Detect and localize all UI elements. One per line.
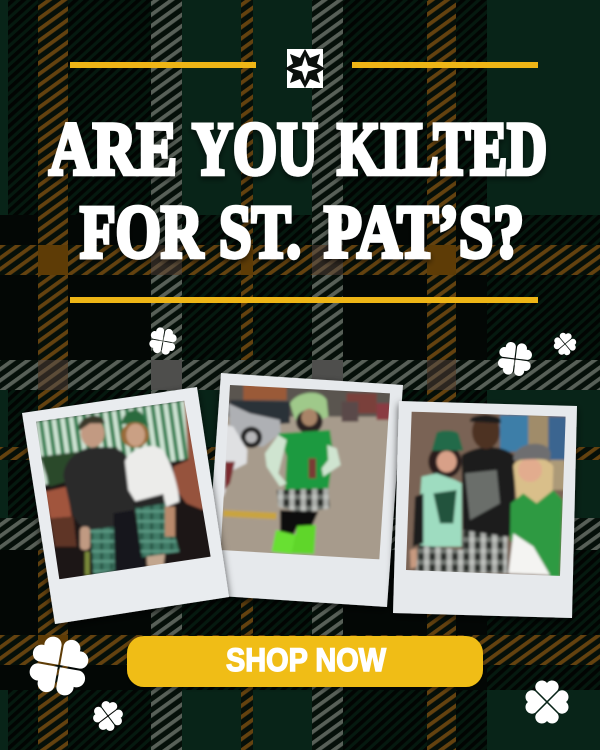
- button: shop now: [127, 636, 483, 687]
- title: YOU: [192, 108, 318, 191]
- woman: [120, 410, 149, 425]
- top divider left: [70, 62, 256, 68]
- polaroid: three friends: [393, 401, 577, 618]
- woman right: [510, 458, 554, 505]
- title: ST.: [219, 191, 301, 274]
- man centre: [462, 447, 515, 573]
- polaroid frame 2: [205, 373, 403, 607]
- polaroid: woman in green: [205, 373, 403, 607]
- icon: shamrock top right small: [553, 332, 577, 356]
- title: PAT’S?: [324, 191, 524, 274]
- title: FOR: [80, 191, 204, 274]
- button: shop now: SHOP NOW: [226, 642, 387, 678]
- figure: [290, 393, 328, 420]
- title: ARE: [49, 108, 177, 191]
- top divider right: [352, 62, 538, 68]
- icon: shamrock bottom right: [526, 680, 568, 724]
- title: [49, 108, 547, 274]
- icon: shamrock bottom left small: [92, 700, 124, 732]
- polaroid frame 3: [393, 401, 577, 618]
- photo 3: [403, 410, 570, 577]
- icon: shamrock top right large: [491, 335, 539, 383]
- man: [63, 447, 135, 533]
- woman left: [428, 445, 462, 478]
- polaroid: couple in kilts: [22, 387, 229, 624]
- polaroid frame 1: [22, 387, 229, 624]
- icon: shamrock top centre: [144, 322, 182, 360]
- photo 2: [221, 385, 390, 560]
- icon: shamrock bottom left large: [19, 626, 99, 706]
- photo 1: [33, 397, 213, 583]
- bottom title divider: [70, 297, 538, 303]
- icon: star logo: [285, 49, 325, 88]
